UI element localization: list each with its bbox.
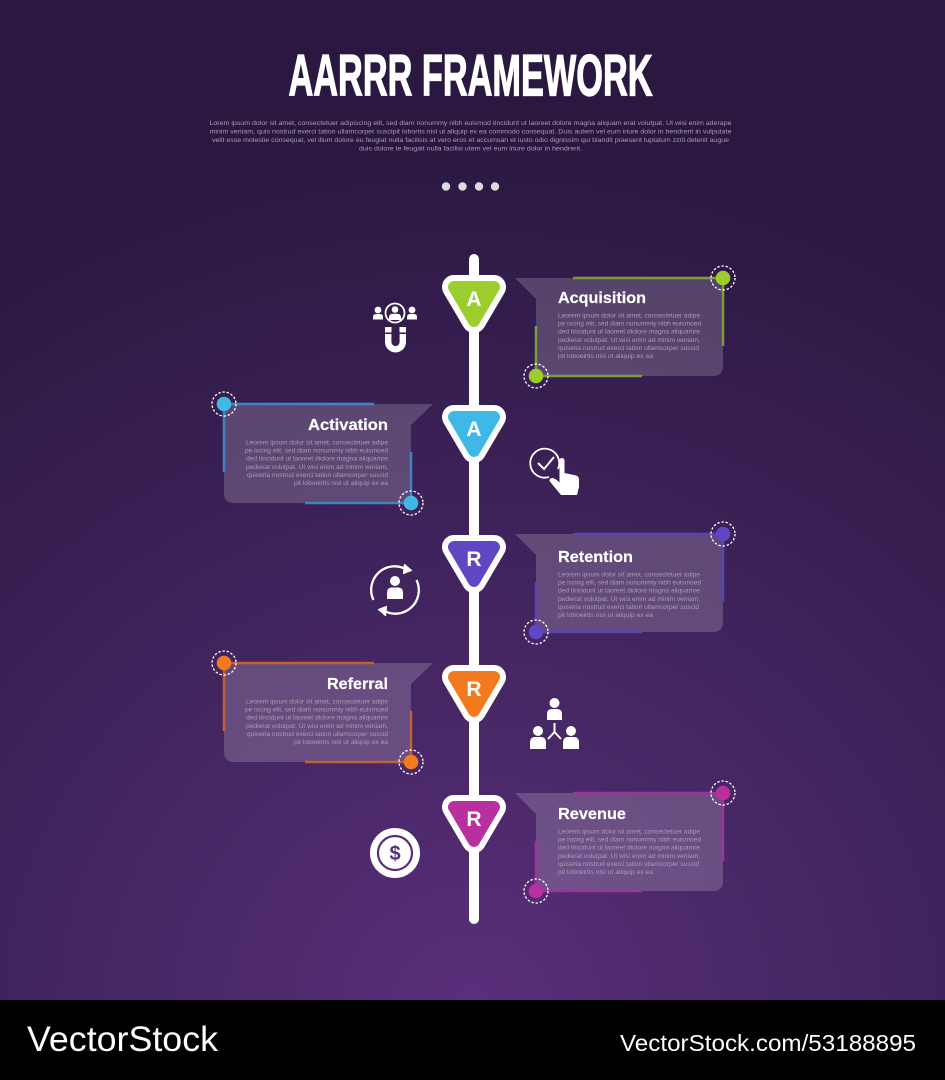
- panel: Acquisition: pedierat volutpat. Ut wisi enim ad minim veniam,: [558, 337, 700, 344]
- badge: Retention R: R: [466, 548, 482, 571]
- timeline spine: [469, 259, 479, 919]
- panel: Revenue: [515, 781, 735, 903]
- footer url text: VectorStock.com/53188895: [620, 1030, 916, 1056]
- panel: Retention: ded tincidunt ut laoreet diolore magna aliquamre: [558, 588, 700, 595]
- panel: Activation: pit loboeirtis nisl ut aliquip ex ea: [294, 480, 388, 487]
- panel: Referral: Referral: [327, 676, 388, 693]
- intro paragraph: Lorem ipsum dolor sit amet, consectetuer adipiscing elit, sed diam nonummy nibh euismod tincidunt ut laoreet dolore magna aliquam erat volutpat. Ut wisi enim aderape: [210, 120, 732, 127]
- panel: Revenue: Leorem ipsum dolor sit amet, consectetuer adipe: [558, 828, 700, 836]
- intro paragraph: velit esse molestie consequat, vel illum dolore eu feugiat nulla facilisis at vero eros et accumsan et iusto odio dignissim qui blandit praesent luptatum zzril delenit augue: [212, 137, 729, 144]
- panel: Revenue: pe iscing elit, sed diam nonummiy nibh euismoed: [558, 837, 701, 844]
- panel: Acquisition: ded tincidunt ut laoreet diolore magna aliquamre: [558, 329, 700, 336]
- panel: Acquisition: pe iscing elit, sed diam nonummiy nibh euismoed: [558, 321, 701, 328]
- panel: Retention: pit loboeirtis nisl ut aliquip ex ea: [558, 612, 653, 619]
- panel: Revenue: Revenue: [558, 806, 626, 823]
- pagination dots: [442, 182, 499, 191]
- footer bar: [0, 1000, 945, 1080]
- badge: Referral R: R: [466, 678, 482, 701]
- icon: dollar coin: $: [389, 843, 401, 865]
- panel: Retention: pedierat volutpat. Ut wisi enim ad minim veniam,: [558, 596, 700, 603]
- panel: Referral: pedierat volutpat. Ut wisi enim ad minim veniam,: [246, 723, 388, 730]
- panel: Activation: pedierat volutpat. Ut wisi enim ad minim veniam,: [246, 464, 388, 471]
- panel: Acquisition: [515, 266, 735, 388]
- panel: Referral: quiseria nostrud exerci tation ullamcorper suscid: [247, 731, 388, 738]
- icon: referral people network: [530, 698, 579, 749]
- icon: dollar coin: [370, 828, 420, 878]
- panel: Revenue: pedierat volutpat. Ut wisi enim ad minim veniam,: [558, 853, 700, 860]
- panel: Revenue: quiseria nostrud exerci tation ullamcorper suscid: [558, 861, 699, 868]
- badge: Referral R: [454, 677, 494, 711]
- badge: Revenue R: R: [466, 808, 482, 831]
- icon: retention cycle: [371, 564, 419, 616]
- badge: Acquisition A: [454, 287, 494, 321]
- panel: Revenue: ded tincidunt ut laoreet diolore magna aliquamre: [558, 845, 700, 852]
- panel: Revenue: pit loboeirtis nisl ut aliquip ex ea: [558, 869, 653, 876]
- panel: Acquisition: quiseria nostrud exerci tation ullamcorper suscid: [558, 345, 699, 352]
- panel: Acquisition: Leorem ipsum dolor sit amet, consectetuer adipe: [558, 312, 700, 320]
- panel: Activation: [212, 392, 433, 515]
- badge: Activation A: A: [466, 418, 482, 441]
- intro paragraph: [210, 120, 732, 152]
- icon: people and magnet: [373, 304, 417, 349]
- intro paragraph: minim veniam, quis nostrud exerci tation ullamcorper suscipit lobortis nisl ut aliquip ex ea commodo consequat. Duis autem vel eum iriure dolor in hendrerit in vulputate: [210, 128, 732, 136]
- panel: Referral: pe iscing elit, sed diam nonummiy nibh euismoed: [245, 707, 388, 714]
- badge: Retention R: [454, 547, 494, 581]
- panel: Acquisition: pit loboeirtis nisl ut aliquip ex ea: [558, 353, 653, 360]
- panel: Retention: pe iscing elit, sed diam nonummiy nibh euismoed: [558, 580, 701, 587]
- footer logo text: VectorStock: [27, 1020, 219, 1059]
- intro paragraph: duis dolore te feugait nulla facilisi utem vel eum iriure dolor in hendrerit.: [359, 146, 582, 152]
- panel: Activation: Leorem ipsum dolor sit amet, consectetuer adipe: [246, 440, 388, 446]
- badge: Acquisition A: A: [466, 288, 482, 311]
- panel: Retention: Retention: [558, 549, 633, 566]
- panel: Referral: ded tincidunt ut laoreet diolore magna aliquamre: [246, 715, 388, 722]
- panel: Activation: quiseria nostrud exerci tation ullamcorper suscid: [247, 472, 388, 479]
- badge: Activation A: [454, 417, 494, 451]
- panel: Referral: Leorem ipsum dolor sit amet, consectetuer adipe: [246, 698, 388, 706]
- panel: Activation: ded tincidunt ut laoreet diolore magna aliquamre: [246, 456, 388, 463]
- panel: Activation: Activation: [308, 417, 388, 434]
- panel: Retention: [515, 522, 735, 644]
- panel: Activation: pe iscing elit, sed diam nonummiy nibh euismoed: [245, 448, 388, 455]
- panel: Retention: quiseria nostrud exerci tation ullamcorper suscid: [558, 604, 699, 611]
- badge: Revenue R: [454, 807, 494, 841]
- panel: Referral: [212, 651, 433, 774]
- panel: Acquisition: Acquisition: [558, 290, 646, 307]
- icon: check and pointing hand: [530, 449, 579, 495]
- panel: Referral: pit loboeirtis nisl ut aliquip ex ea: [294, 739, 388, 746]
- title: AARRR FRAMEWORK: [288, 44, 653, 108]
- panel: Retention: Leorem ipsum dolor sit amet, consectetuer adipe: [558, 572, 700, 578]
